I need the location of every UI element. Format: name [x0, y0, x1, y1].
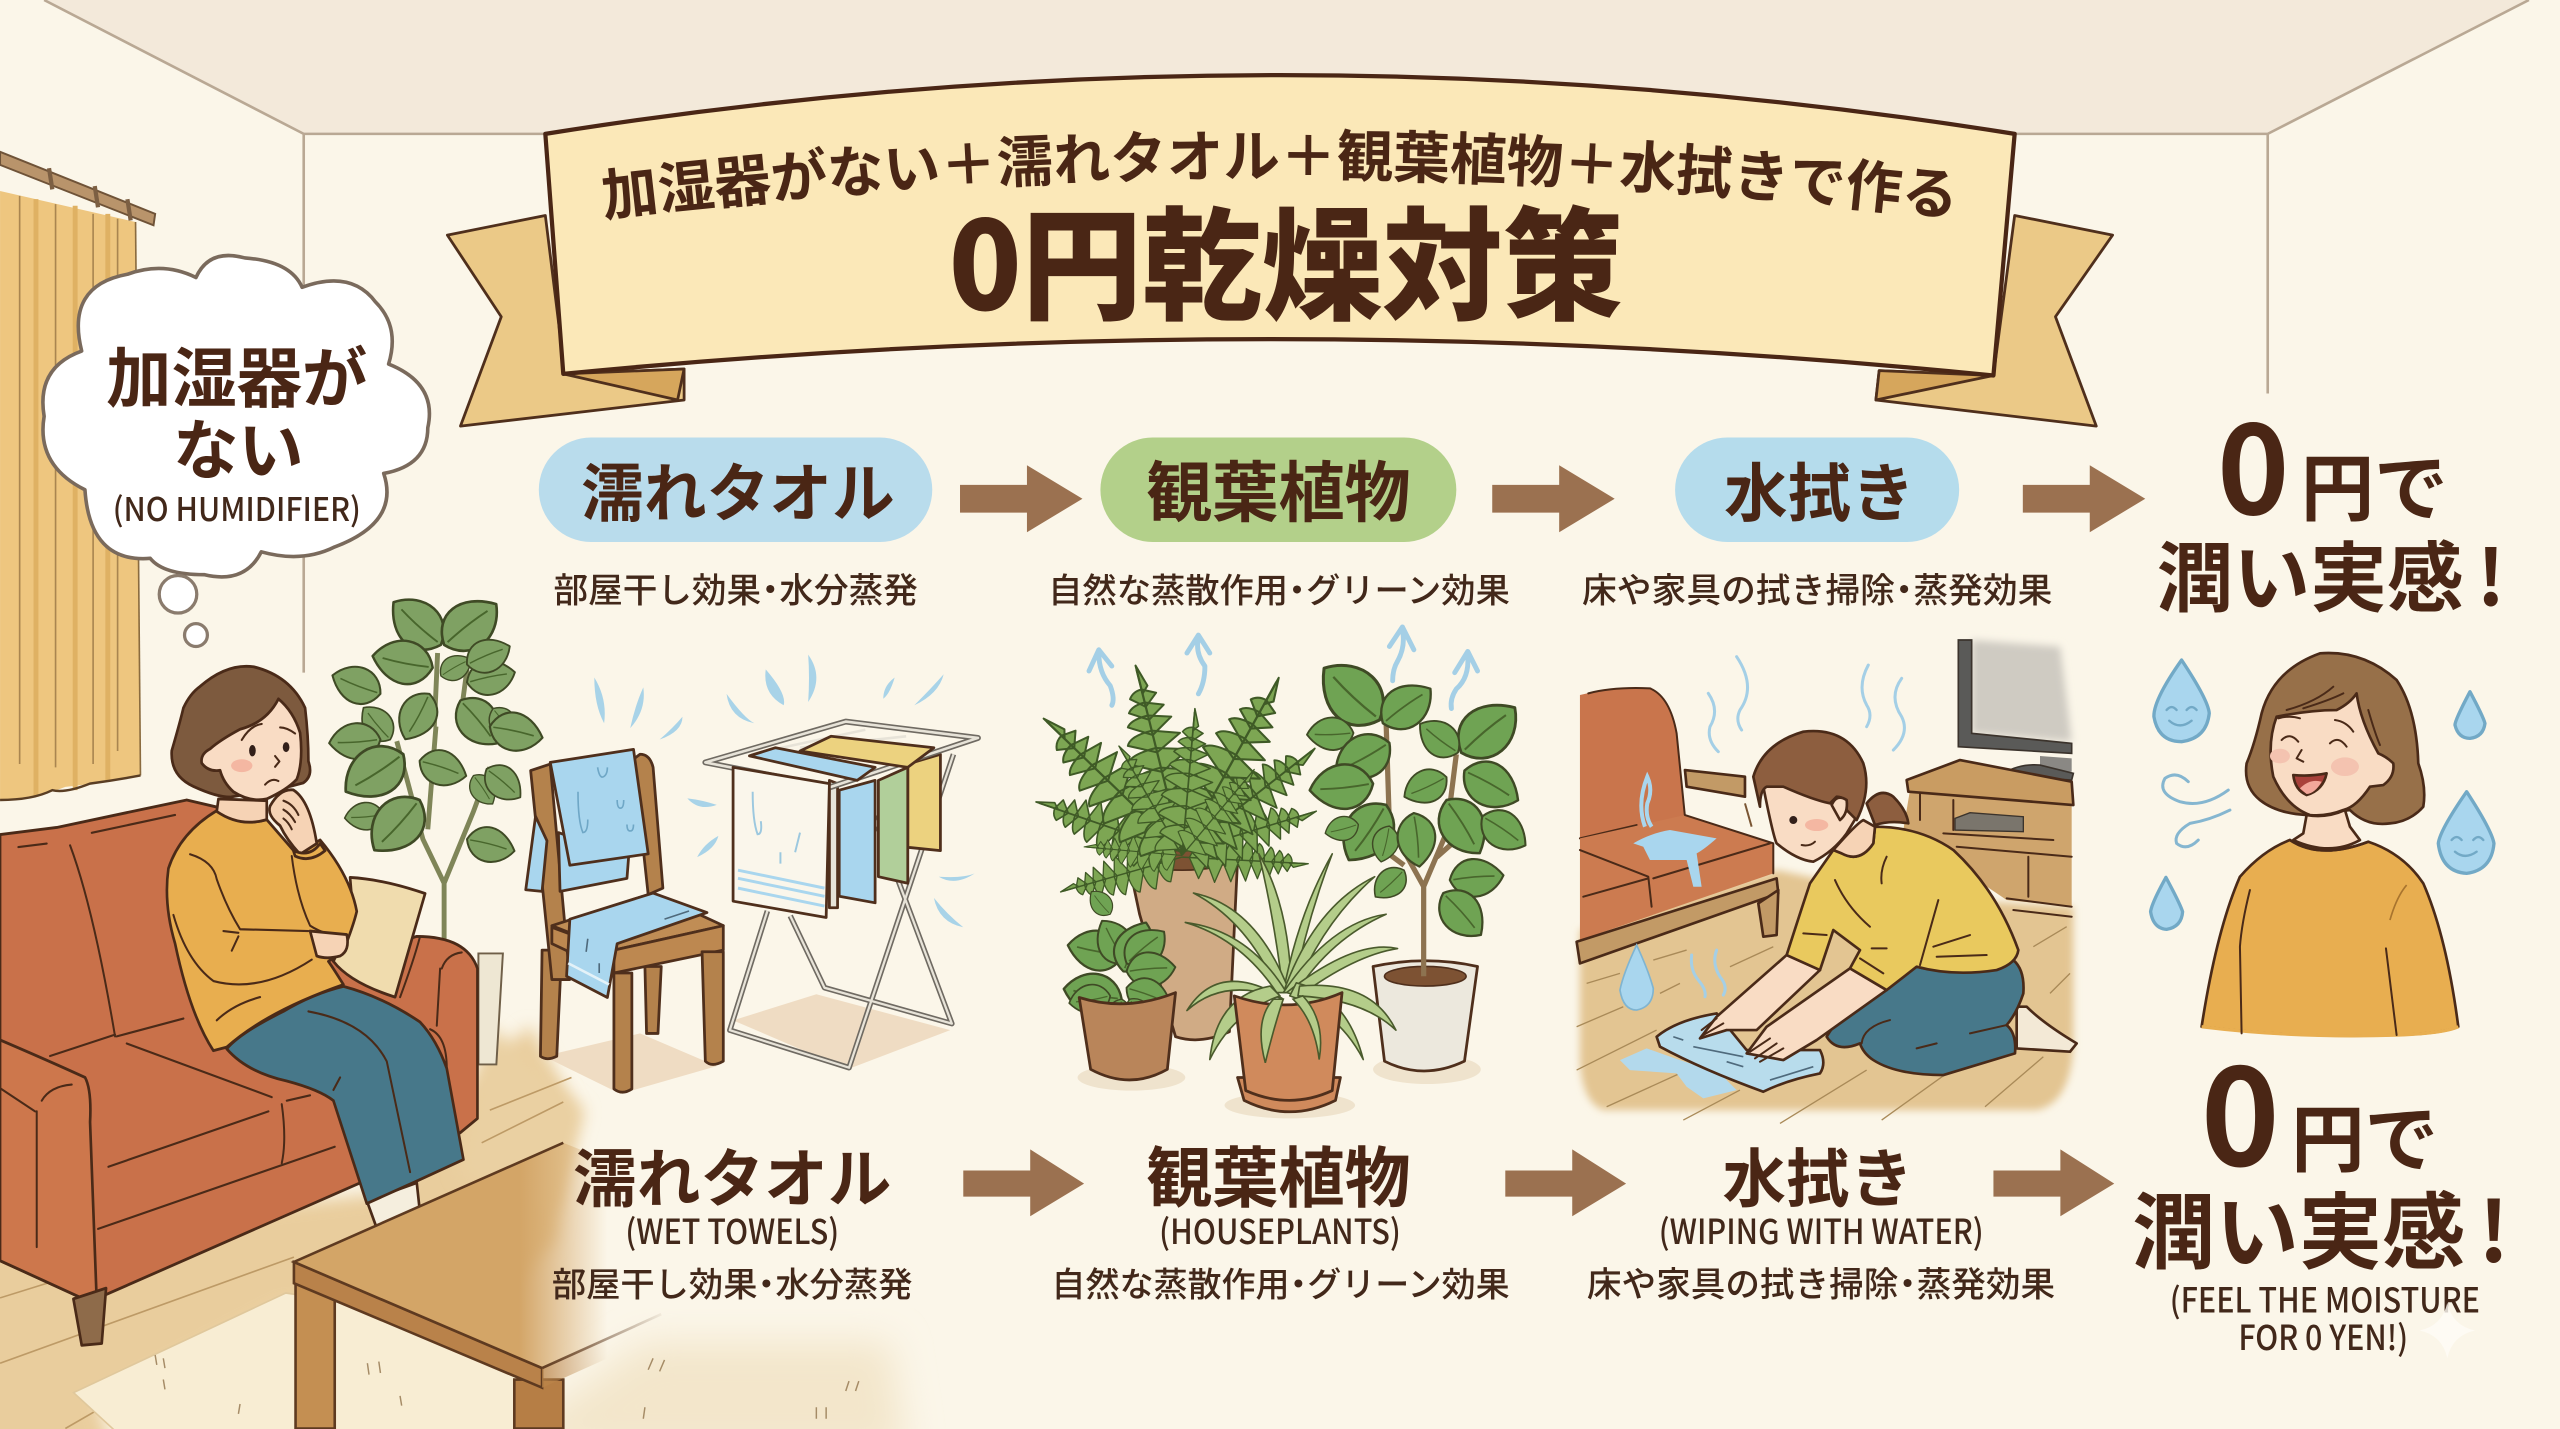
bubble small circles [159, 575, 207, 647]
towel on chair seat [567, 893, 707, 998]
top flow: pill 2 houseplants: 観葉植物 [1146, 440, 1411, 536]
armchair [1577, 688, 1778, 963]
arrow 2 bottom [1505, 1149, 1626, 1216]
bottom flow: houseplants: 観葉植物 [1146, 1126, 1411, 1222]
woman sweater [167, 811, 357, 1051]
chair [531, 754, 723, 1092]
corner sparkle watermark [2420, 1303, 2475, 1358]
woman top [1787, 827, 2018, 990]
arrow 1 top [960, 465, 1082, 532]
arrow 1 bottom [963, 1149, 1084, 1216]
kneeling woman [1657, 731, 2077, 1092]
tall plant [1306, 649, 1536, 1071]
top result message [2157, 373, 2505, 629]
floor and rug [0, 1025, 906, 1429]
table [294, 1143, 816, 1429]
terracotta pot with saucer [1234, 993, 1342, 1112]
woman towel [1657, 1013, 1823, 1092]
houseplant behind the sofa [326, 586, 546, 1064]
small terracotta pot [1079, 993, 1176, 1080]
top result message: 0 円で [2217, 373, 2448, 550]
illustration: wiping furniture and floor [1577, 640, 2077, 1123]
vapor squiggles [1691, 657, 1904, 997]
arrow 3 bottom [1993, 1149, 2114, 1216]
happy woman body [2202, 840, 2458, 1036]
sofa body [0, 800, 477, 1345]
wipe scene floor [1580, 870, 2073, 1110]
bottom flow: wiping [1587, 1129, 2055, 1306]
sofa leg [73, 1288, 106, 1345]
shadows under pots [1078, 1064, 1185, 1091]
banner subtitle curved: 加湿器がない＋濡れタオル＋観葉植物＋水拭きで作る [602, 128, 1951, 221]
thought bubble: (NO HUMIDIFIER) [113, 484, 361, 531]
bottom flow: wet towels [552, 1129, 912, 1306]
beige pot [1128, 851, 1238, 1040]
vapor marks [594, 655, 975, 927]
top caption 3: 床や家具の拭き掃除・蒸発効果 [1582, 563, 2052, 613]
sofa cushion [333, 877, 425, 997]
bottom result message [2132, 1011, 2509, 1360]
sofa left arm [0, 1040, 97, 1302]
hanging towels on rack [829, 754, 940, 908]
bottom flow: wet towels: 部屋干し効果・水分蒸発 [552, 1256, 912, 1306]
bottom flow: houseplants [1051, 1126, 1510, 1306]
woman head [1867, 793, 1908, 825]
water drop on floor [1620, 945, 1653, 1010]
arrow 2 top [1492, 465, 1615, 532]
bottom flow: wiping: (WIPING WITH WATER) [1659, 1204, 1984, 1254]
bottom flow: wet towels: (WET TOWELS) [625, 1204, 839, 1254]
top flow: pill 3 wiping [1675, 438, 1959, 542]
TV stand [1903, 760, 2073, 917]
floor shadows [544, 994, 950, 1094]
illustration: wet towels on chair and rack [526, 655, 978, 1094]
curtain and rod [0, 152, 155, 800]
bottom result message: FOR 0 YEN!) [2238, 1310, 2408, 1360]
bottom result message: 0 円で [2201, 1011, 2438, 1205]
bottom flow: wet towels: 濡れタオル [573, 1129, 891, 1221]
bubble text: 加湿器が [106, 326, 367, 421]
woman arms [1700, 955, 1820, 1038]
sofa and worried woman [0, 666, 477, 1345]
top caption 2: 自然な蒸散作用・グリーン効果 [1048, 562, 1510, 612]
drops with smiles [2151, 660, 2494, 929]
wind curls [2163, 775, 2230, 847]
woman legs [227, 986, 463, 1204]
top flow: pill 3 wiping: 水拭き [1724, 443, 1915, 535]
top flow: pill 2 houseplants [1100, 438, 1456, 542]
bottom result message: (FEEL THE MOISTURE [2170, 1273, 2480, 1323]
banner ribbon [446, 73, 2114, 428]
top flow: pill 1 wet towels: 濡れタオル [581, 443, 895, 535]
top result message: 潤い実感 ! [2157, 518, 2505, 629]
spider plant [1185, 854, 1398, 1060]
water on armchair [1633, 830, 1717, 887]
banner left tail [447, 216, 684, 426]
thought bubble [43, 255, 429, 647]
illustration: houseplants [1019, 627, 1536, 1118]
banner main panel [545, 75, 2015, 375]
small leafy plant [1060, 885, 1177, 1035]
spilled water on floor [1620, 1048, 1737, 1098]
woman feet [367, 1183, 422, 1233]
bottom flow: wiping: 水拭き [1722, 1129, 1913, 1221]
towel on chair back [526, 749, 648, 891]
happy woman head [2246, 653, 2424, 850]
banner right tail [1876, 216, 2113, 426]
bottom flow: houseplants: (HOUSEPLANTS) [1159, 1204, 1401, 1254]
bottom flow: wiping: 床や家具の拭き掃除・蒸発効果 [1587, 1256, 2055, 1306]
woman head [172, 666, 310, 822]
TV [1958, 640, 2073, 780]
banner main title: 0円乾燥対策 [949, 169, 1623, 346]
bottom result message: 潤い実感 ! [2132, 1165, 2509, 1286]
drying rack [705, 722, 978, 1068]
woman hand at chin [269, 790, 317, 854]
fern [1019, 657, 1334, 915]
bottom flow: houseplants: 自然な蒸散作用・グリーン効果 [1051, 1257, 1510, 1306]
thought bubble: ない [173, 397, 304, 492]
white towel [733, 767, 829, 918]
vapor arrows up [1089, 627, 1478, 709]
happy woman and water drops [2151, 653, 2494, 1036]
arrow 3 top [2023, 465, 2145, 532]
top caption 1: 部屋干し効果・水分蒸発 [554, 562, 918, 612]
